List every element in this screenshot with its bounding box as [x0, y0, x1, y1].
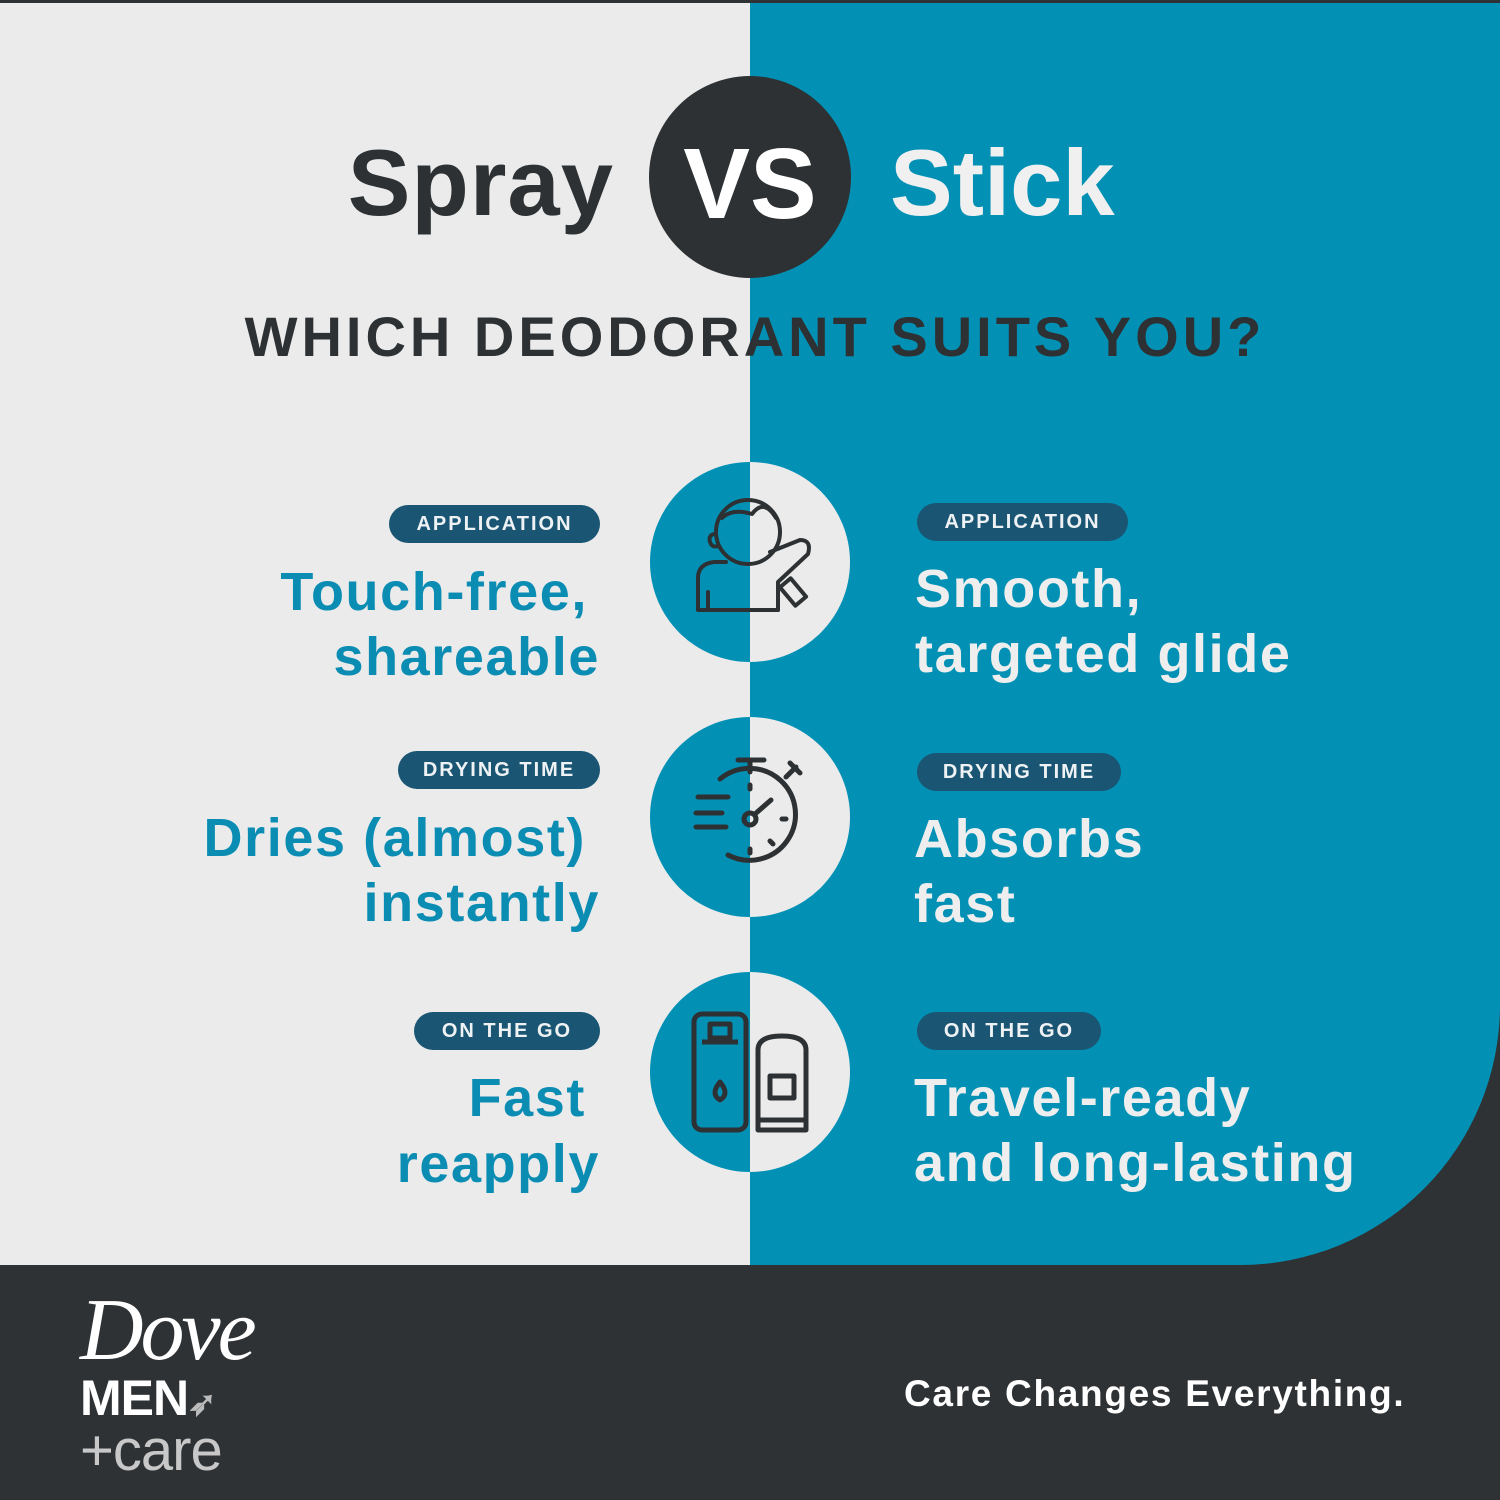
pill: drying left: DRYING TIME: [423, 759, 575, 781]
text: shareable: [333, 627, 600, 687]
icon: drying time circle: [650, 717, 850, 917]
text: travel-ready: [914, 1068, 1357, 1193]
title: Stick: Stick: [890, 130, 1115, 235]
text: smooth: Smooth,: [915, 559, 1142, 619]
icon: on the go circle: [650, 972, 850, 1172]
text: smooth: [915, 559, 1291, 684]
pill: application right: [917, 503, 1128, 541]
pill: on the go right: ON THE GO: [944, 1020, 1074, 1042]
text: absorbs: [914, 809, 1144, 934]
text: instantly: [364, 873, 600, 933]
panel: spray background: [0, 3, 750, 1265]
icon: application circle: [650, 462, 850, 662]
pill: application left: APPLICATION: [416, 513, 573, 535]
subtitle: WHICH DEODORANT SUITS YOU?: [245, 305, 1265, 368]
VS badge: VS: [683, 128, 817, 240]
text: absorbs: Absorbs: [914, 809, 1144, 869]
pill: application left: [389, 505, 600, 543]
logo: Dove Men+Care: Dove: [80, 1282, 254, 1379]
text: smooth: targeted glide: [915, 624, 1291, 684]
pill: application right: APPLICATION: [944, 511, 1101, 533]
text: reapply: [397, 1134, 600, 1194]
pill: drying right: DRYING TIME: [943, 761, 1095, 783]
text: travel-ready: Travel-ready: [914, 1068, 1251, 1128]
panel: stick background: [750, 3, 1500, 1265]
pill: on the go right: [917, 1012, 1101, 1050]
pill: on the go left: [414, 1012, 600, 1050]
text: touch-free: Touch-free,: [280, 562, 588, 622]
pill: on the go left: ON THE GO: [442, 1020, 572, 1042]
logo: Dove Men+Care: MEN➶: [80, 1370, 216, 1426]
text: dries: Dries (almost): [204, 808, 586, 868]
logo: Dove Men+Care: [79, 1282, 255, 1483]
tagline: Care Changes Everything.: [904, 1373, 1405, 1414]
pill: drying left: [398, 751, 600, 789]
title: Spray: Spray: [348, 130, 614, 235]
VS badge: [649, 76, 851, 278]
text: fast reapply: Fast: [469, 1068, 586, 1128]
text: travel-ready: and long-lasting: [914, 1133, 1357, 1193]
pill: drying right: [917, 753, 1121, 791]
text: absorbs: fast: [914, 874, 1016, 934]
logo: Dove Men+Care: +care: [80, 1418, 222, 1483]
